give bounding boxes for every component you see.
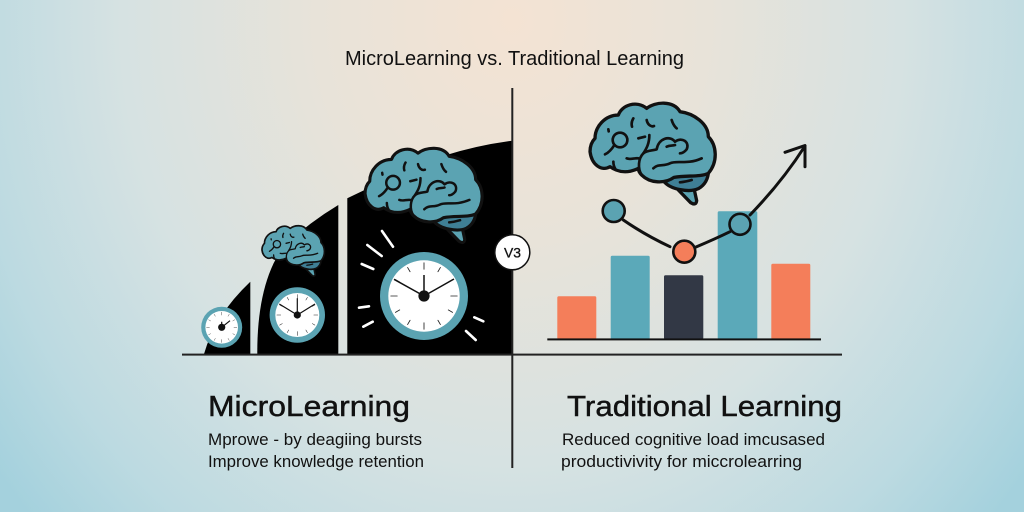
- trend line with arrow: [623, 146, 805, 247]
- icon: brain: [590, 103, 715, 204]
- text block: Traditional Learning description: Reduced cognitive load imcusased: [562, 431, 825, 449]
- text block: Traditional Learning description: productivivity for miccrolearring: [561, 453, 802, 471]
- panel: microlearning growth illustration: [201, 141, 512, 354]
- title: MicroLearning vs. Traditional Learning: [345, 48, 684, 70]
- clock motion rays: [359, 231, 483, 340]
- icon: large brain: [365, 148, 482, 243]
- icon: medium clock: [270, 287, 325, 343]
- heading: MicroLearning: MicroLearning: [208, 391, 410, 423]
- text block: Traditional Learning description: [561, 431, 825, 471]
- horizontal divider: [182, 354, 842, 356]
- text block: MicroLearning description: Mprowe - by deagiing bursts: [208, 431, 422, 449]
- bar chart: [547, 211, 821, 340]
- panel: traditional learning chart: [547, 103, 821, 340]
- heading: Traditional Learning: Traditional Learning: [567, 391, 842, 423]
- growth shape: large: [347, 141, 512, 354]
- version badge: [495, 235, 530, 270]
- trend node: end: [730, 214, 750, 235]
- icon: large clock: [380, 252, 468, 340]
- vertical divider: [511, 88, 513, 468]
- growth shape: small: [204, 282, 250, 354]
- version badge: V3: [504, 244, 521, 260]
- text block: MicroLearning description: Improve knowledge retention: [208, 453, 424, 471]
- trend node: start: [603, 200, 625, 222]
- growth shape: medium: [257, 205, 338, 354]
- icon: small clock: [201, 307, 242, 348]
- text block: MicroLearning description: [208, 431, 424, 471]
- trend node: orange: [673, 241, 695, 263]
- icon: small brain: [262, 226, 324, 276]
